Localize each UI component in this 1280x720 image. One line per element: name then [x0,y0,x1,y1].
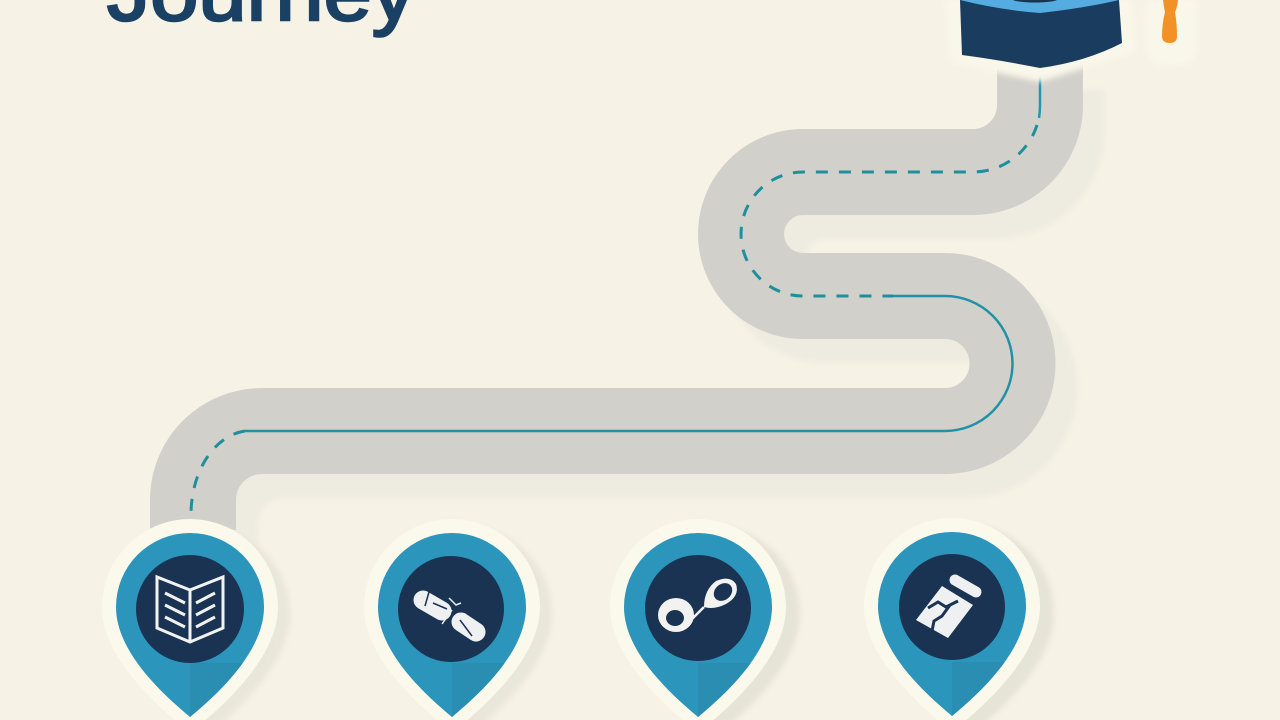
pin: broken jar [878,532,1054,720]
road [193,60,1040,530]
route line [191,68,1040,515]
icon: broken jar [916,580,976,638]
pin: handcuffs [624,533,800,720]
icon: scroll [423,592,476,636]
road shadow [215,90,1062,560]
icon: handcuffs [658,579,737,632]
orange marker [1146,0,1197,66]
pin: book [102,519,290,720]
start block halo [945,0,1136,82]
pin: diploma scroll [378,533,551,720]
icon: open book [157,577,223,642]
start block [960,0,1122,68]
